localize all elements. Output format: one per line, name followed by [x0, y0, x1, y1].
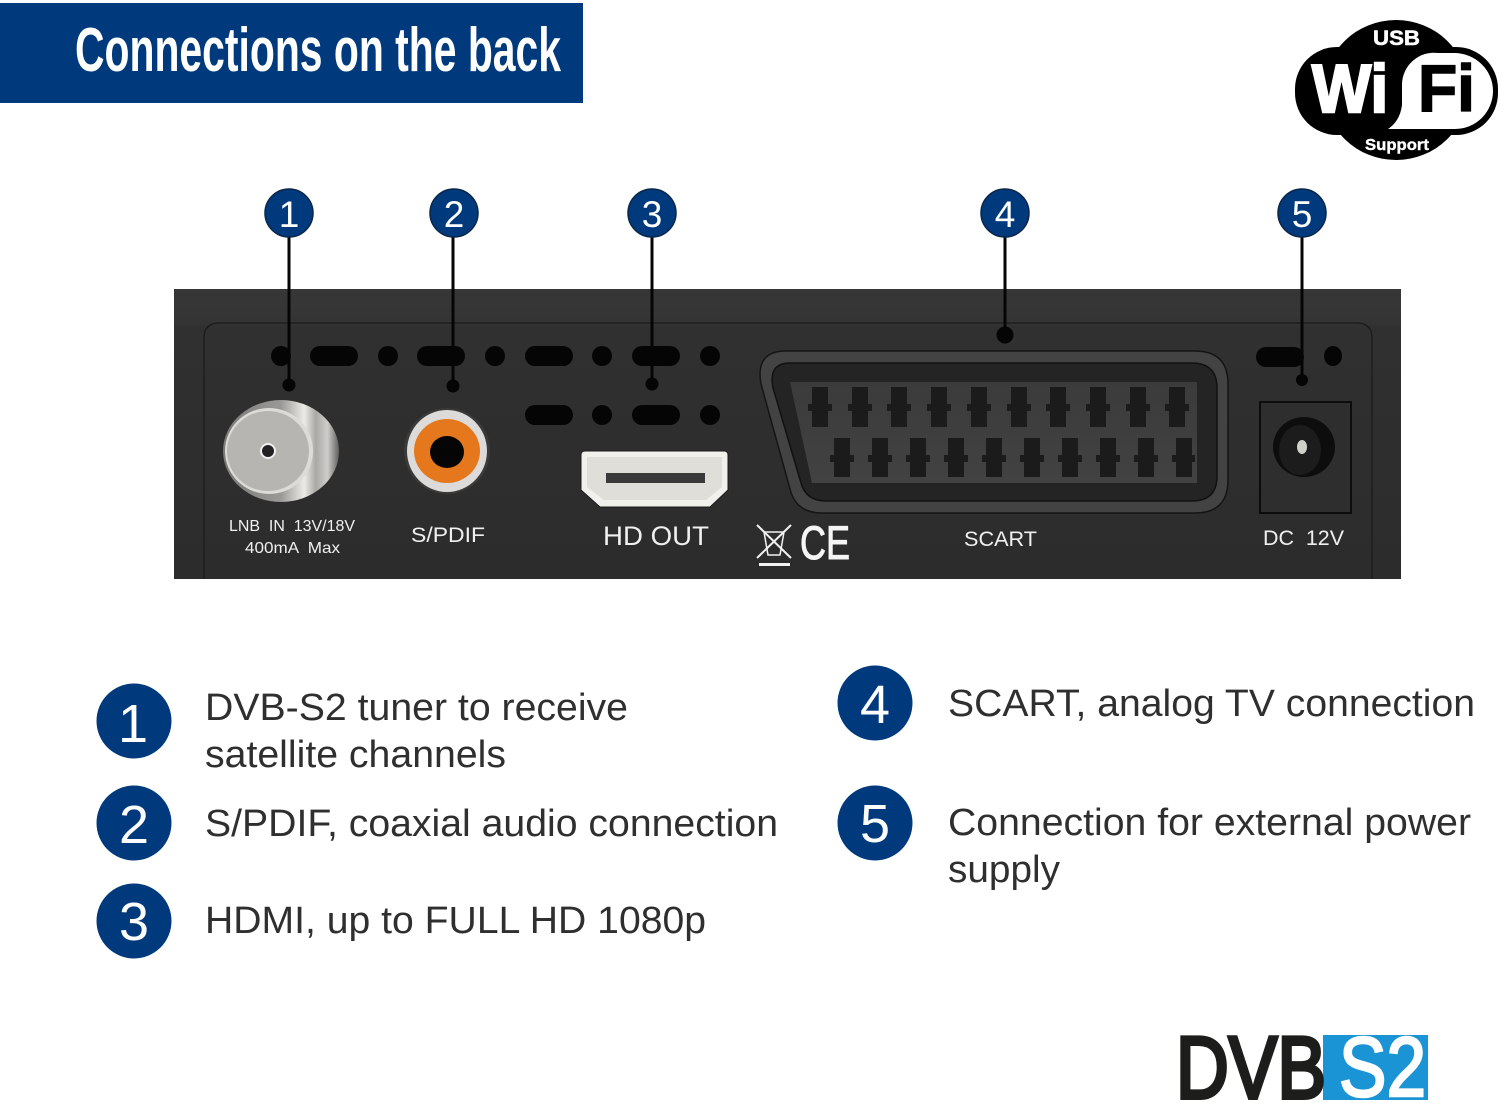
legend item 4: 4 — [860, 675, 890, 735]
callout 4 — [981, 189, 1029, 344]
callout 3: 3 — [642, 194, 662, 235]
legend item 1 — [96, 684, 628, 776]
callout 2 — [430, 189, 478, 392]
icon: USB WiFi support logo: Wi — [1312, 51, 1388, 127]
callout 5 — [1278, 189, 1326, 386]
legend item 3: 3 — [119, 892, 149, 952]
callout lines and number badges on the device — [265, 189, 1326, 392]
port labels: LNB IN 13V/18V — [229, 518, 355, 535]
S/PDIF connector — [404, 408, 490, 494]
callout 3 — [628, 189, 676, 390]
HDMI connector — [581, 451, 728, 507]
icon: USB WiFi support logo: USB — [1373, 27, 1420, 50]
legend item 1: satellite channels — [205, 734, 506, 776]
legend item 2: 2 — [119, 795, 149, 855]
callout 1 — [265, 189, 313, 392]
legend item 2 — [96, 786, 778, 860]
title banner — [0, 3, 583, 103]
port labels — [229, 518, 1344, 557]
legend item 2: S/PDIF, coaxial audio connection — [205, 803, 778, 845]
CE mark: CE — [800, 516, 850, 569]
callout 2: 2 — [444, 194, 464, 235]
callout 1: 1 — [279, 194, 299, 235]
legend item 1: 1 — [118, 694, 148, 754]
port labels: S/PDIF — [411, 524, 485, 547]
icon: USB WiFi support logo: Support — [1365, 137, 1430, 154]
SCART connector — [760, 351, 1228, 513]
legend item 4: SCART, analog TV connection — [948, 683, 1475, 725]
legend item 1: DVB-S2 tuner to receive — [205, 687, 628, 729]
port labels: DC 12V — [1263, 527, 1344, 550]
legend item 4 — [838, 666, 1475, 740]
port labels: HD OUT — [603, 521, 709, 551]
callout 5: 5 — [1292, 194, 1312, 235]
legend item 5: 5 — [860, 794, 890, 854]
icon: USB WiFi support logo: Fi — [1418, 51, 1475, 125]
ventilation holes — [271, 346, 1342, 425]
icon: USB WiFi support logo — [1295, 20, 1498, 160]
panel: receiver back side — [174, 289, 1401, 579]
callout 4: 4 — [995, 194, 1015, 235]
legend item 5: Connection for external power — [948, 802, 1471, 844]
title banner: Connections on the back — [75, 16, 561, 85]
icon: WEEE bin — [757, 525, 791, 566]
DC power jack — [1260, 402, 1351, 513]
legend item 3: HDMI, up to FULL HD 1080p — [205, 900, 706, 942]
port labels: 400mA Max — [245, 540, 340, 557]
legend item 3 — [96, 884, 706, 958]
legend item 5: supply — [948, 849, 1060, 891]
port labels: SCART — [964, 528, 1037, 551]
LNB connector — [223, 400, 339, 502]
legend item 5 — [838, 786, 1471, 891]
